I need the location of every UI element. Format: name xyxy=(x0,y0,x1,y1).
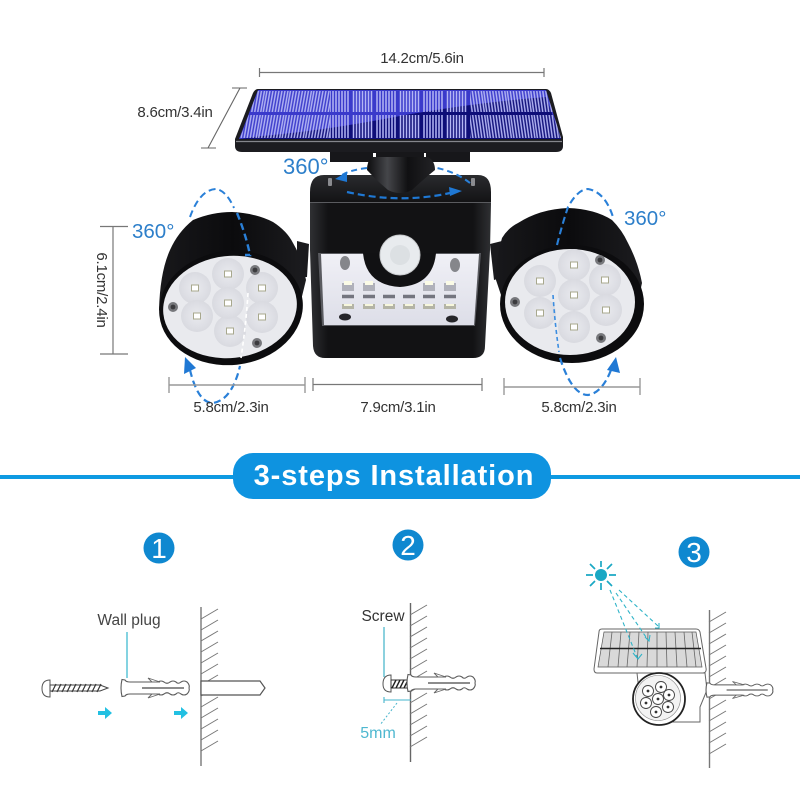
dimension: panel depth xyxy=(137,88,247,148)
rotation arrow: right lamp xyxy=(553,189,666,395)
dimension: right lamp width xyxy=(504,378,640,416)
center sensor body xyxy=(310,157,491,358)
screw xyxy=(42,680,108,697)
solar panel outline xyxy=(594,629,706,673)
wall with drilled hole xyxy=(201,607,265,766)
dimension: right lamp width: 5.8cm/2.3in xyxy=(541,399,617,416)
ball joint xyxy=(367,157,435,193)
step 2 number badge: 2 xyxy=(400,530,416,561)
dimension: lamp height xyxy=(93,226,128,354)
LED window xyxy=(318,253,481,326)
step 3 xyxy=(586,536,773,768)
sunlight rays xyxy=(610,590,659,659)
dimension: center width: 7.9cm/3.1in xyxy=(360,399,436,416)
direction arrows xyxy=(98,707,188,719)
step 1 number badge: 1 xyxy=(151,533,167,564)
fixture body and lamp outline xyxy=(633,673,707,725)
step 2 xyxy=(360,530,475,762)
dimension: left lamp width: 5.8cm/2.3in xyxy=(193,399,269,416)
screw in plug xyxy=(383,673,475,693)
screw label: Screw xyxy=(361,608,405,625)
rotation arrow: left lamp xyxy=(132,189,250,403)
heading: 3-steps Installation: 3-steps Installation xyxy=(254,460,534,492)
step 3 number badge xyxy=(678,536,710,568)
left lamp xyxy=(153,212,309,372)
wall plug xyxy=(121,678,189,698)
step 3 number badge: 3 xyxy=(686,537,702,568)
wall plug label xyxy=(97,612,161,678)
5mm gap dimension: 5mm xyxy=(360,725,396,742)
wall plug label: Wall plug xyxy=(97,612,161,629)
step 2 number badge xyxy=(392,530,424,561)
rotation arrow: top xyxy=(283,154,470,198)
5mm gap dimension xyxy=(360,697,411,742)
rotation arrow: top: 360° xyxy=(283,154,329,179)
step 1 number badge xyxy=(144,532,174,564)
wall xyxy=(709,610,726,768)
dimension: panel width xyxy=(260,50,544,77)
step 1 xyxy=(42,532,265,766)
dimension: panel width: 14.2cm/5.6in xyxy=(380,50,464,67)
motion sensor xyxy=(380,235,420,275)
screw label xyxy=(361,608,405,677)
dimension: center width xyxy=(313,378,482,416)
rotation arrow: left lamp: 360° xyxy=(132,220,174,243)
sun icon xyxy=(586,561,616,590)
section divider line xyxy=(0,475,800,479)
dimension: left lamp width xyxy=(169,377,305,416)
heading: 3-steps Installation xyxy=(233,453,551,499)
panel bracket xyxy=(330,152,470,162)
right lamp xyxy=(490,208,644,363)
wall xyxy=(410,603,427,762)
dimension: lamp height: 6.1cm/2.4in xyxy=(93,252,110,328)
rotation arrow: right lamp: 360° xyxy=(624,207,666,230)
dimension: panel depth: 8.6cm/3.4in xyxy=(137,104,213,121)
solar panel xyxy=(235,88,565,152)
wall plug in wall xyxy=(706,682,773,698)
